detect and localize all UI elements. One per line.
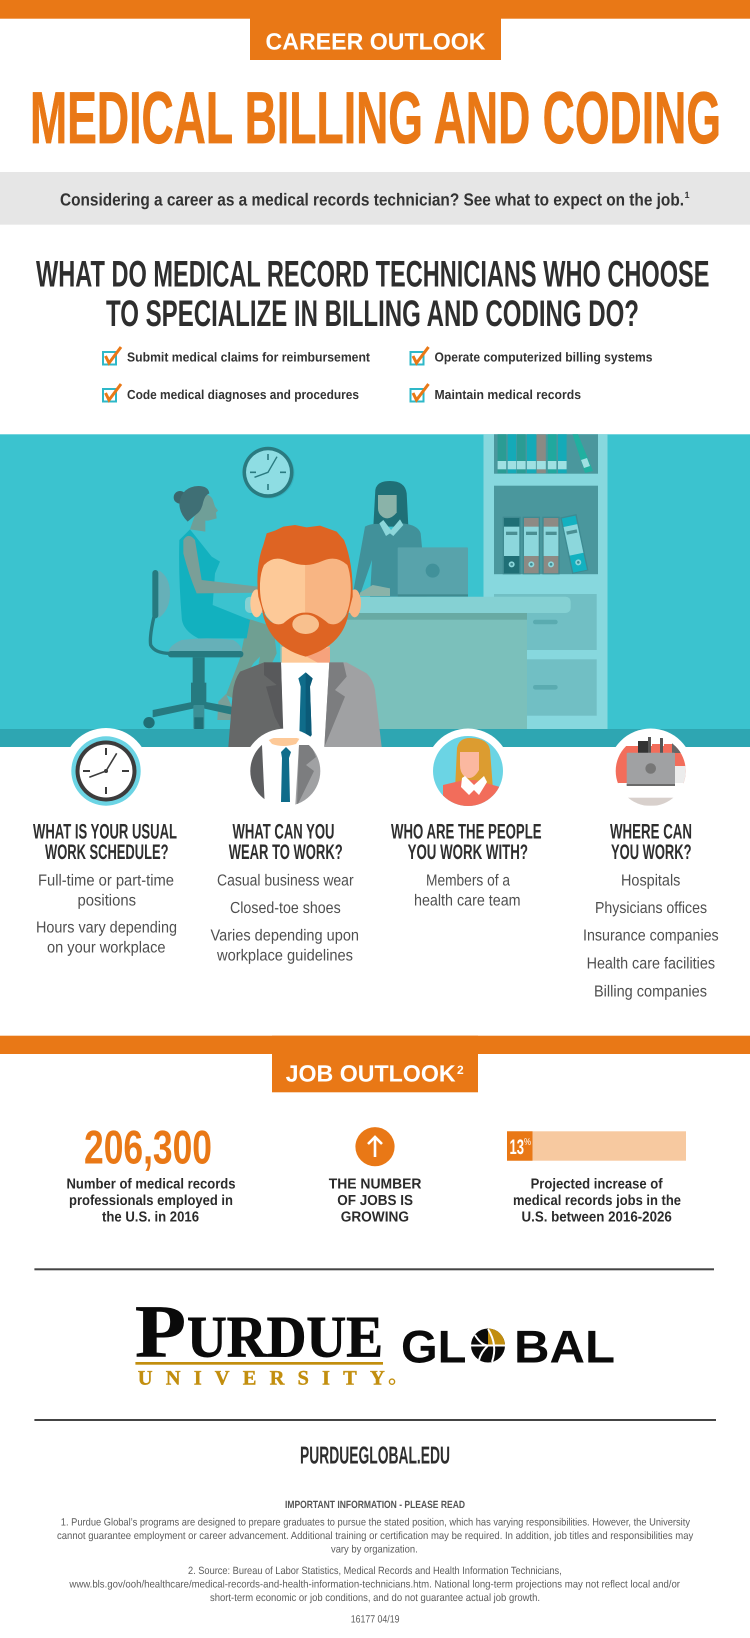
column: people you work with: health care team: [414, 892, 521, 909]
mouth: [292, 615, 319, 634]
column: what to wear: WEAR TO WORK?: [229, 841, 343, 864]
seated woman on chair: [143, 486, 277, 729]
binder four tilted: [560, 514, 588, 574]
column: what to wear: Casual business wear: [217, 872, 354, 889]
Global wordmark with globe: BAL: [514, 1320, 615, 1372]
column: work schedule: positions: [78, 892, 136, 909]
column: where you can work: WHERE CAN: [610, 820, 692, 843]
check item: maintain records: [410, 384, 581, 402]
top banner with career outlook tab: CAREER OUTLOOK: [266, 28, 486, 54]
important information footnotes: [57, 1499, 694, 1625]
column: where you can work: Health care facilities: [587, 955, 715, 972]
important information footnotes: 2. Source: Bureau of Labor Statistics, Medical Records and Health Information Technicians,: [188, 1565, 562, 1577]
icon: coworker woman: [433, 728, 503, 806]
icon: office workplace: [616, 728, 686, 806]
woman figure: [174, 486, 277, 720]
logo: Purdue Global: [135, 1291, 615, 1390]
important information footnotes: www.bls.gov/ooh/healthcare/medical-records-and-health-information-technicians.htm. National long-term projections may not reflect local and/or: [68, 1578, 680, 1590]
stat: 206,300 employed: the U.S. in 2016: [102, 1210, 199, 1226]
column: what to wear: [210, 820, 359, 965]
column: people you work with: WHO ARE THE PEOPLE: [391, 820, 542, 843]
subtitle band: Considering a career as a medical records technician? See what to expect on the job.: [60, 190, 684, 210]
column: where you can work: Billing companies: [594, 983, 707, 1000]
important information footnotes: 1. Purdue Global’s programs are designed to prepare graduates to pursue the stated position, which has varying responsibilities. However, the University: [61, 1517, 691, 1529]
column: where you can work: Hospitals: [621, 872, 680, 889]
column: work schedule: Hours vary depending: [36, 920, 177, 937]
stat: 13 percent increase: Projected increase of: [531, 1176, 663, 1192]
icon: up arrow: [355, 1127, 395, 1166]
stat: 206,300 employed: Number of medical records: [66, 1176, 236, 1192]
website url: PURDUEGLOBAL.EDU: [300, 1442, 450, 1469]
column: where you can work: Physicians offices: [595, 900, 707, 917]
check item: operate systems: Operate computerized billing systems: [434, 350, 652, 365]
jacket: [228, 662, 382, 747]
stat: 206,300 employed: [66, 1121, 236, 1226]
icon: clock: [63, 728, 149, 814]
drawers: [494, 594, 597, 716]
binders: [503, 514, 588, 574]
stat: jobs growing: [329, 1127, 422, 1226]
Purdue University wordmark: [135, 1291, 395, 1390]
check item: submit claims: Submit medical claims for reimbursement: [127, 350, 371, 365]
stat: jobs growing: GROWING: [341, 1210, 409, 1226]
binder two: [523, 517, 540, 574]
column: work schedule: on your workplace: [47, 940, 166, 957]
Global wordmark with globe: [401, 1320, 615, 1372]
column: what to wear: WHAT CAN YOU: [232, 820, 334, 843]
check item: code diagnoses: Code medical diagnoses and procedures: [127, 387, 359, 402]
top banner with career outlook tab: [0, 0, 750, 60]
column: where you can work: YOU WORK?: [611, 841, 692, 864]
column: what to wear: Varies depending upon: [210, 928, 359, 945]
icon: suit and tie: [250, 728, 320, 804]
office illustration: [0, 434, 750, 747]
bar chart: 13%: [507, 1131, 686, 1161]
stat: 13 percent increase: [507, 1131, 686, 1226]
Purdue University wordmark: P: [135, 1291, 186, 1374]
important information footnotes: 16177 04/19: [351, 1613, 400, 1625]
necktie: [298, 672, 313, 742]
binder three: [542, 517, 560, 574]
section heading: [36, 254, 710, 334]
column: work schedule: [33, 820, 177, 957]
stat: jobs growing: OF JOBS IS: [337, 1193, 413, 1209]
column: people you work with: [391, 820, 542, 909]
column: work schedule: Full-time or part-time: [38, 872, 174, 889]
desk top: [245, 597, 571, 613]
bar chart: 13%: %: [524, 1137, 531, 1148]
Global wordmark with globe: GL: [401, 1320, 466, 1372]
laptop: [398, 547, 468, 597]
important information footnotes: short-term economic or job conditions, and do not guarantee actual job growth.: [210, 1592, 540, 1604]
stat: 13 percent increase: U.S. between 2016-2026: [522, 1210, 672, 1226]
bookshelf: [484, 434, 608, 729]
important information footnotes: IMPORTANT INFORMATION - PLEASE READ: [285, 1499, 465, 1511]
important information footnotes: vary by organization.: [331, 1544, 418, 1556]
neck and shirt: [281, 647, 330, 747]
Purdue University wordmark: URDUE: [187, 1304, 383, 1370]
column: where you can work: Insurance companies: [583, 928, 719, 945]
stat: 13 percent increase: medical records jobs in the: [513, 1193, 681, 1209]
job outlook banner: JOB OUTLOOK: [286, 1061, 456, 1087]
ears: [250, 589, 361, 617]
job outlook banner: 2: [457, 1063, 464, 1077]
column: where you can work: [583, 820, 719, 1000]
binder one: [503, 517, 521, 574]
beard: [262, 610, 349, 657]
duties checklist: [103, 347, 652, 402]
column: work schedule: WHAT IS YOUR USUAL: [33, 820, 177, 843]
check item: maintain records: Maintain medical records: [434, 387, 581, 402]
face: [260, 559, 351, 633]
column: what to wear: workplace guidelines: [216, 948, 353, 965]
wall clock: [242, 447, 294, 498]
stat: jobs growing: THE NUMBER: [329, 1176, 422, 1192]
column: people you work with: Members of a: [426, 872, 510, 889]
subtitle band: 1: [684, 190, 690, 200]
subtitle band: [0, 172, 750, 225]
column: work schedule: WORK SCHEDULE?: [45, 841, 168, 864]
stat: 206,300 employed: 206,300: [84, 1121, 212, 1174]
important information footnotes: cannot guarantee employment or career advancement. Additional training or certification may be required. In addition, job titles and responsibilities may: [57, 1530, 694, 1542]
column: what to wear: Closed-toe shoes: [230, 900, 341, 917]
office chair: [143, 570, 243, 729]
desk: [280, 613, 527, 729]
job outlook banner: [0, 1036, 750, 1092]
Purdue University wordmark: UNIVERSITY: [138, 1368, 385, 1390]
bar chart: 13%: 13: [510, 1136, 524, 1159]
stat: 206,300 employed: professionals employed in: [69, 1193, 233, 1209]
books: [498, 434, 593, 473]
column: people you work with: YOU WORK WITH?: [408, 841, 528, 864]
colleague at laptop: [353, 481, 468, 597]
hair: [257, 525, 353, 613]
foreground man in suit: [228, 525, 382, 747]
